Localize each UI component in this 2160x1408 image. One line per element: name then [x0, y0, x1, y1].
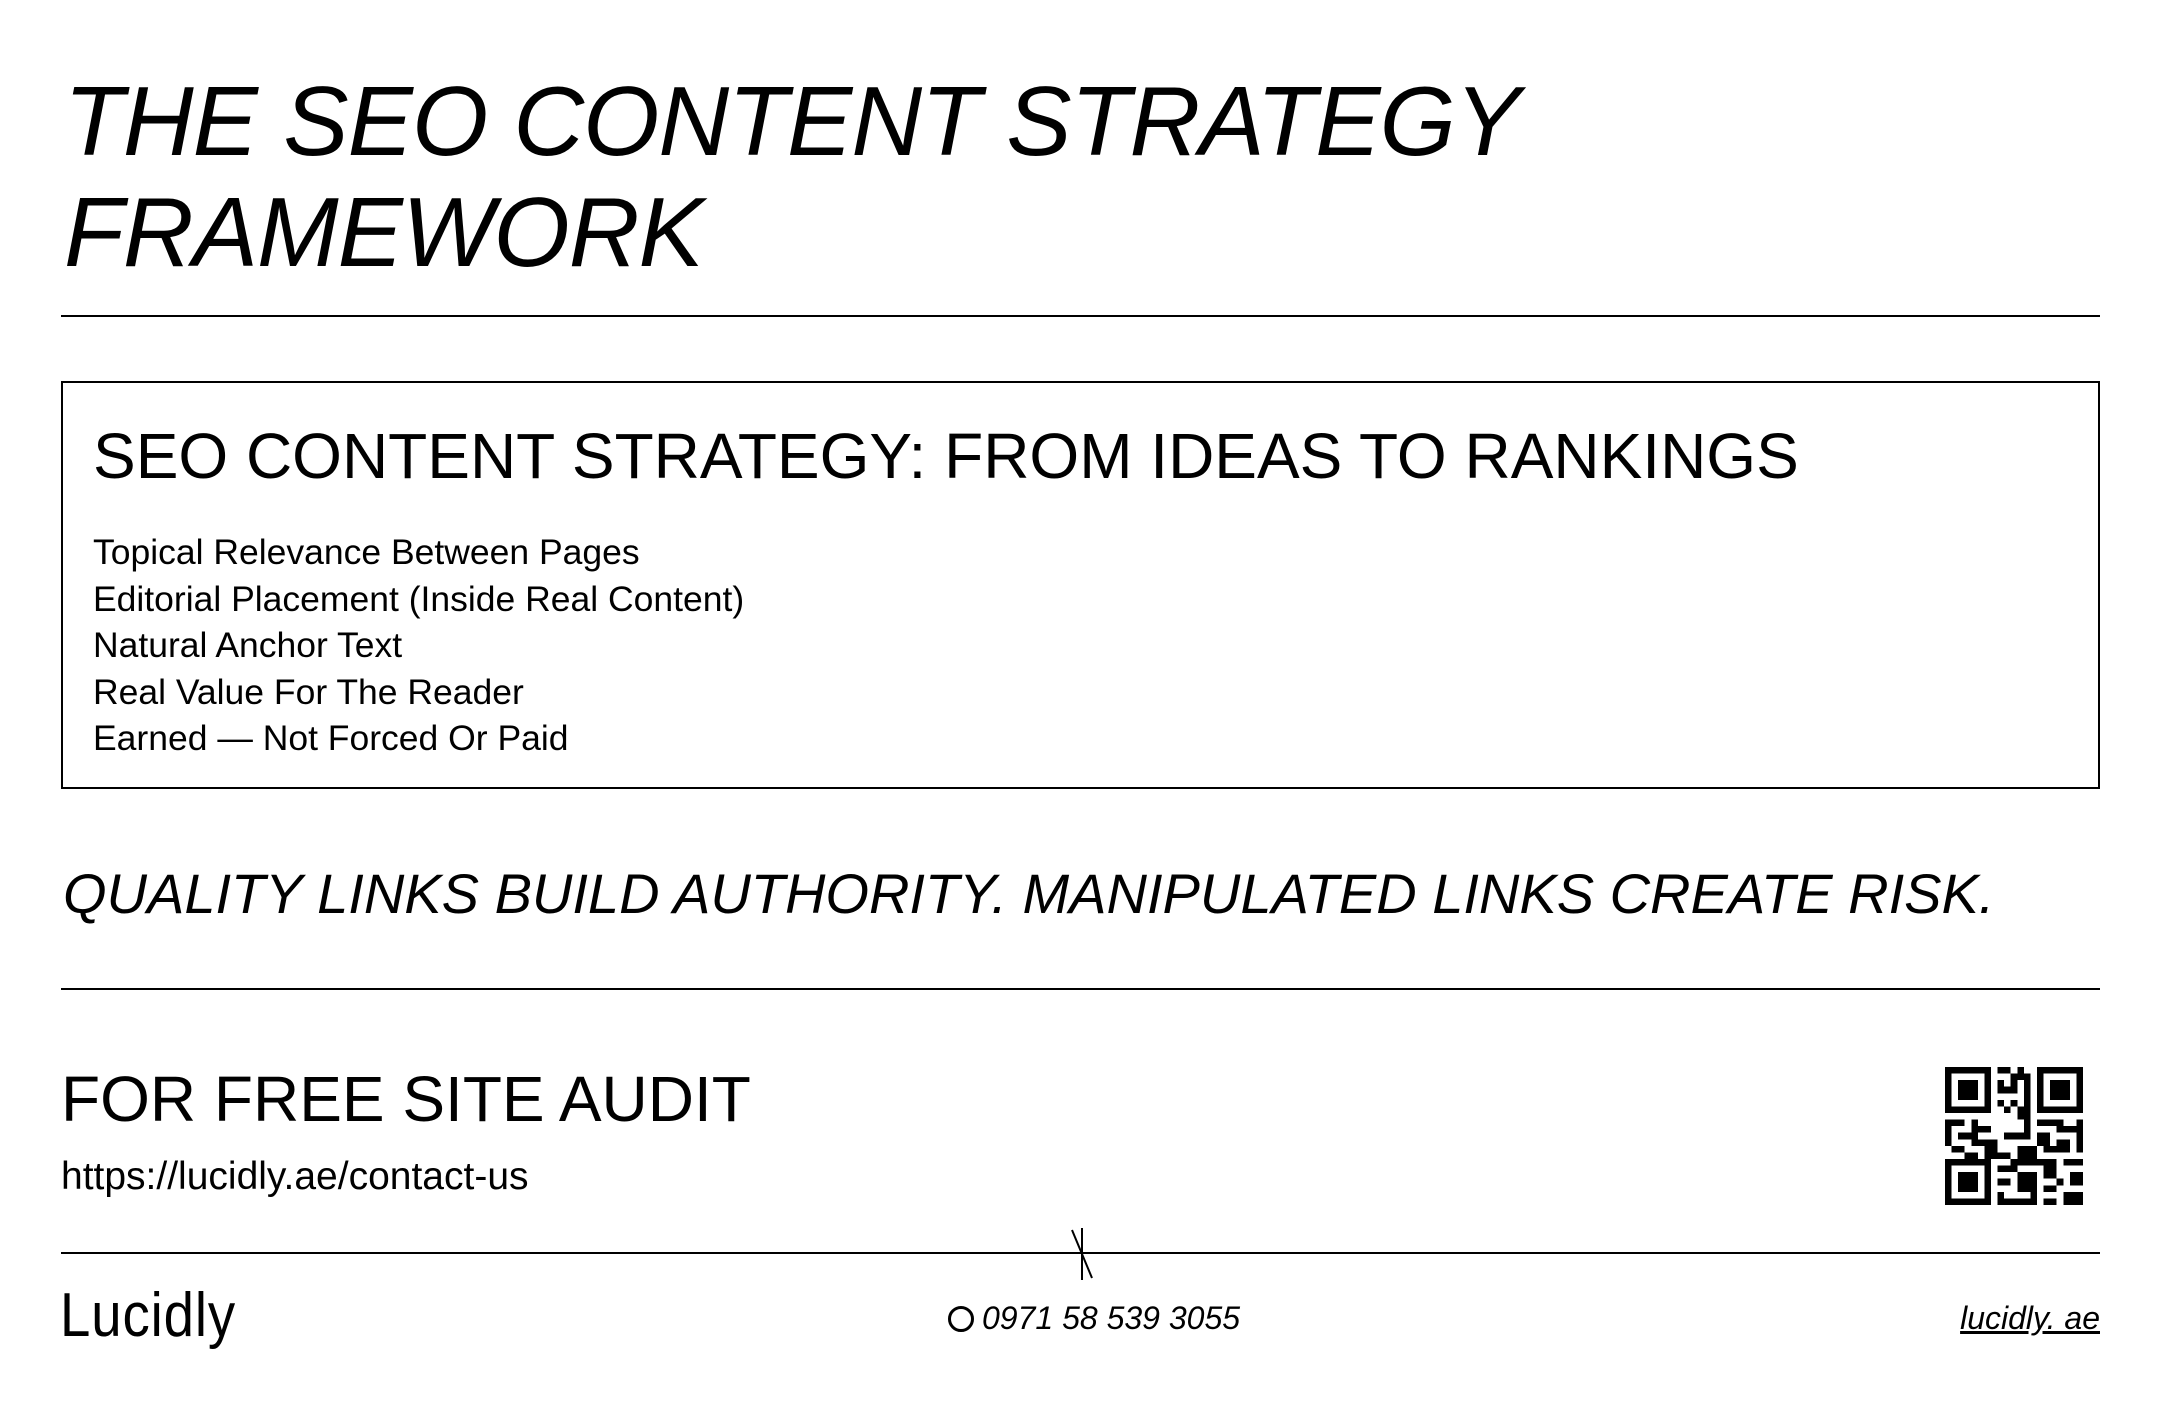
- panel: strategy box: [61, 381, 2100, 789]
- list of principles: Real Value For The Reader: [93, 672, 524, 712]
- list of principles: Topical Relevance Between Pages: [93, 532, 640, 572]
- list of principles: Editorial Placement (Inside Real Content): [93, 578, 744, 618]
- title: FRAMEWORK: [64, 177, 703, 287]
- box heading: SEO CONTENT STRATEGY: FROM IDEAS TO RANKINGS: [93, 420, 1799, 492]
- icon: star cross: [1071, 1228, 1093, 1280]
- logo: Lucidly: Lucidly: [60, 1281, 236, 1350]
- tagline: QUALITY LINKS BUILD AUTHORITY. MANIPULATED LINKS CREATE RISK.: [63, 862, 1994, 925]
- CTA url: https://lucidly.ae/contact-us: [61, 1155, 529, 1198]
- list of principles: Earned — Not Forced Or Paid: [93, 718, 569, 758]
- list of principles: Natural Anchor Text: [93, 625, 402, 665]
- website link: lucidly. ae: [1960, 1300, 2100, 1336]
- phone contact: 0971 58 539 3055: [982, 1300, 1240, 1336]
- title: THE SEO CONTENT STRATEGY: [64, 66, 1519, 176]
- icon: QR code: [1945, 1067, 2083, 1205]
- title: [64, 66, 1526, 287]
- CTA heading: FOR FREE SITE AUDIT: [61, 1063, 751, 1135]
- list of principles: [93, 532, 744, 758]
